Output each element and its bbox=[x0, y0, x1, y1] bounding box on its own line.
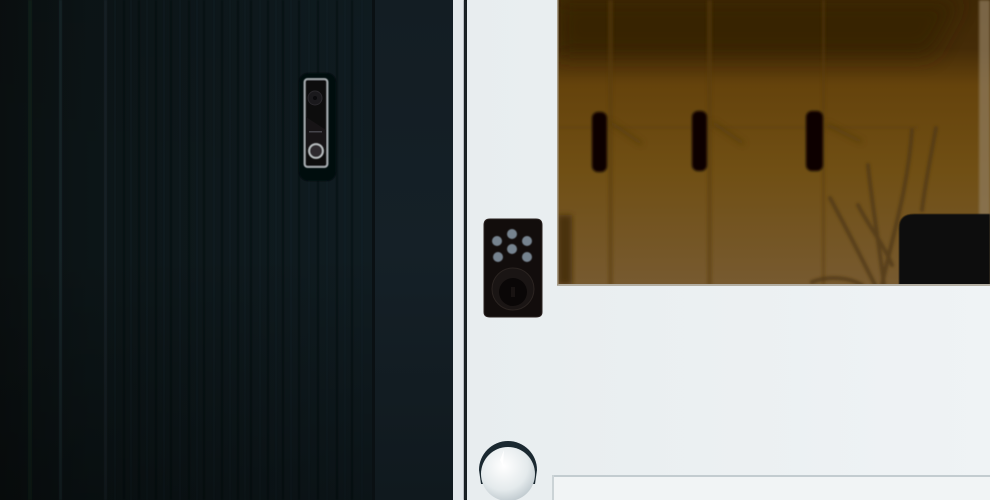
interior panel seams bbox=[608, 0, 826, 284]
dark chair back bbox=[899, 214, 990, 285]
panel: white door frame strip bbox=[453, 0, 467, 500]
keypad buttons bbox=[492, 229, 532, 262]
coat hook shadows bbox=[616, 124, 859, 142]
icon: white door knob bbox=[479, 441, 537, 500]
right window edge light bbox=[978, 0, 990, 222]
deadbolt cylinder bbox=[492, 268, 534, 310]
window sill shadow bbox=[557, 284, 990, 286]
icon: keypad deadbolt lock bbox=[484, 219, 542, 317]
interior dark ceiling bbox=[560, 8, 944, 58]
panel: white door bbox=[467, 0, 990, 500]
coat hooks bbox=[592, 111, 823, 172]
panel: dark wood-grain wall bbox=[0, 0, 453, 500]
dried plant stems bbox=[812, 128, 936, 285]
icon: video doorbell bbox=[299, 73, 336, 181]
window with warm interior bbox=[558, 0, 990, 285]
left shadow object bbox=[558, 215, 572, 285]
